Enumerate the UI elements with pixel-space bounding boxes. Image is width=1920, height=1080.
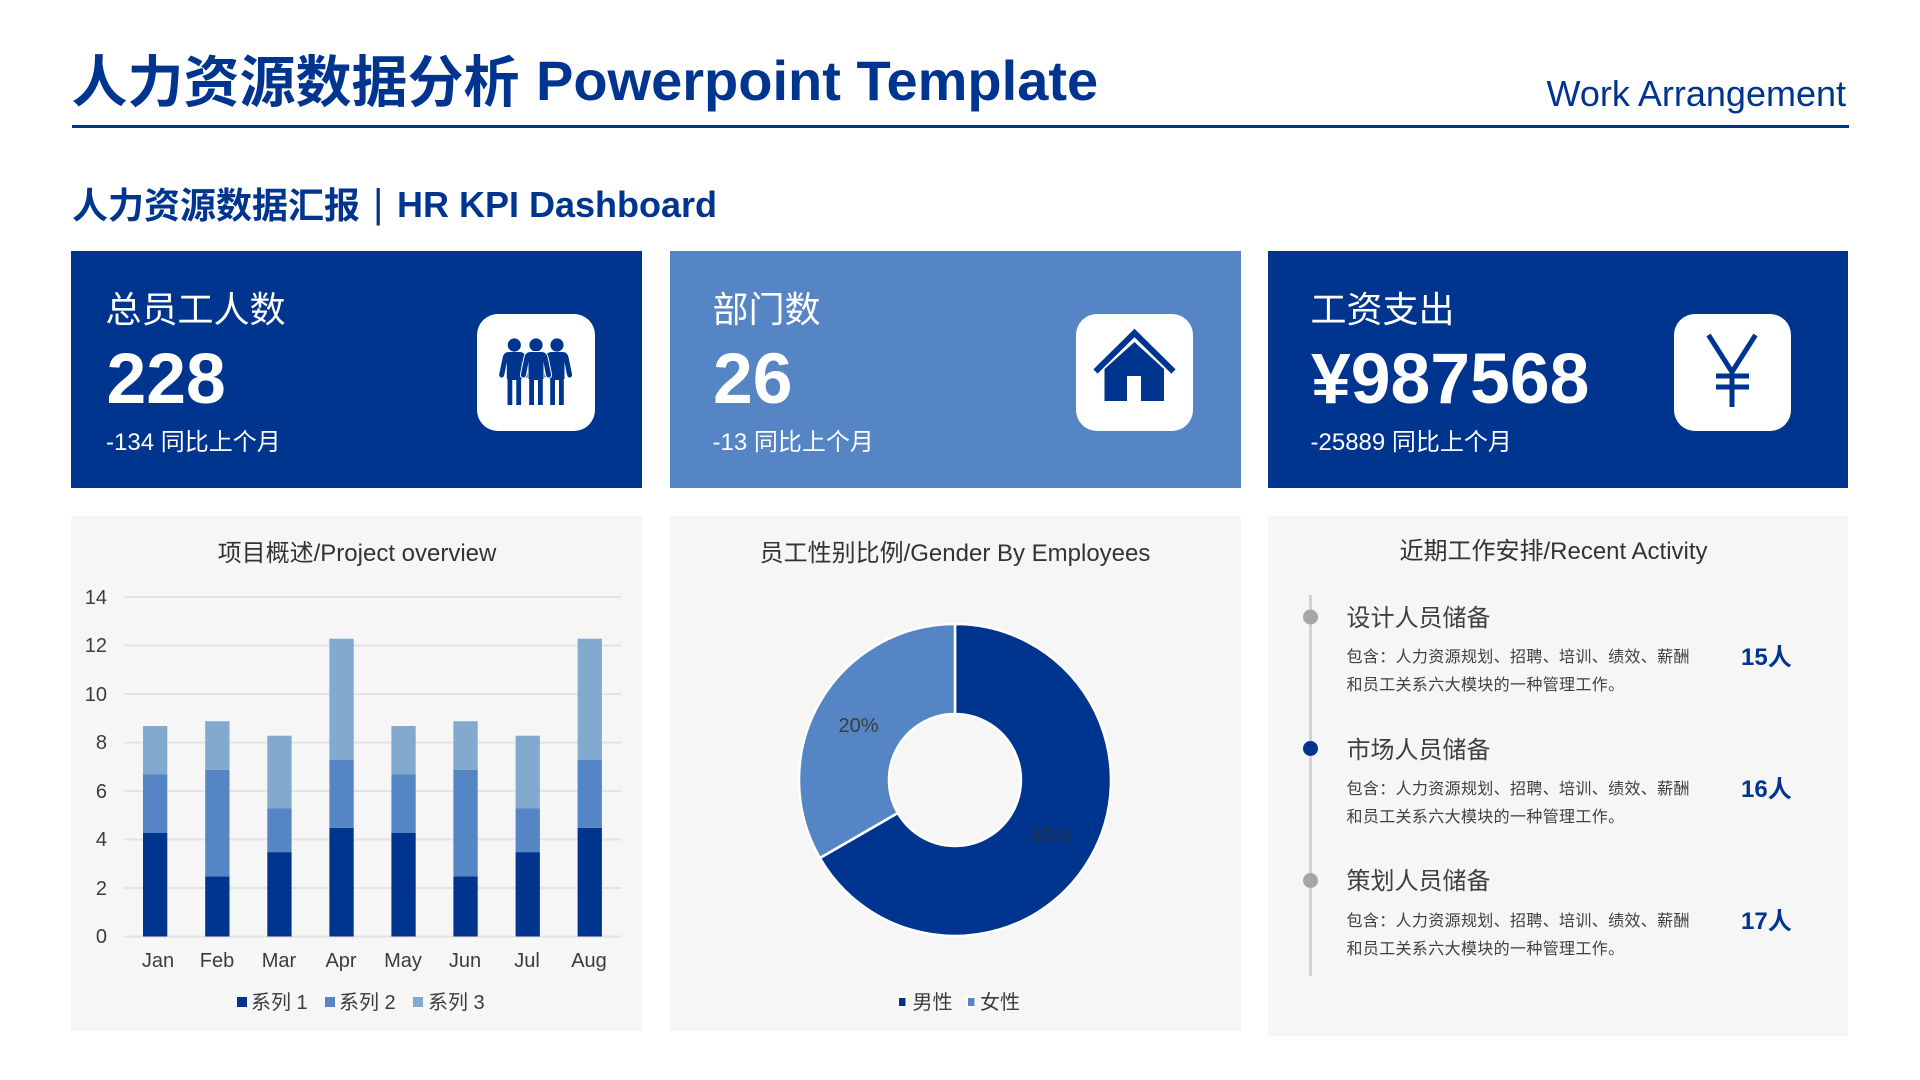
- KPI card: departments: [670, 251, 1241, 488]
- y axis labels: 4: [96, 829, 107, 851]
- x axis labels: Feb: [200, 950, 234, 972]
- KPI card: total employees: [71, 251, 642, 488]
- subtitle: HR KPI Dashboard: [397, 184, 717, 225]
- timeline item 2: 和员工关系六大模块的一种管理工作。: [1346, 808, 1624, 826]
- KPI value: ¥987568: [1311, 339, 1589, 419]
- title: 人力资源数据分析: [72, 51, 520, 114]
- x axis labels: Jun: [449, 950, 481, 972]
- timeline item 1: [1303, 605, 1792, 694]
- donut label 40%: 40%: [1031, 825, 1072, 847]
- subtitle: |: [373, 182, 383, 226]
- timeline item 2: 包含：人力资源规划、招聘、培训、绩效、薪酬: [1346, 780, 1690, 798]
- stacked bar chart: [143, 639, 602, 936]
- panel: recent activity: [1268, 516, 1848, 1036]
- timeline line: [1309, 595, 1312, 976]
- x axis labels: [142, 950, 607, 972]
- y axis labels: [85, 587, 107, 948]
- timeline item 3: 策划人员储备: [1346, 868, 1490, 895]
- KPI label: 部门数: [712, 289, 821, 330]
- y axis labels: 2: [96, 878, 107, 900]
- y axis labels: 12: [85, 635, 107, 657]
- legend: 系列 2: [339, 991, 396, 1014]
- legend: 女性: [980, 991, 1020, 1014]
- donut chart: [799, 624, 1111, 936]
- KPI comparison: -25889 同比上个月: [1310, 429, 1512, 456]
- x axis labels: Mar: [262, 950, 297, 972]
- KPI comparison: -13 同比上个月: [712, 429, 874, 456]
- panel heading: 近期工作安排/Recent Activity: [1399, 538, 1708, 565]
- timeline item 1: 设计人员储备: [1346, 605, 1490, 632]
- icon: people: [477, 314, 595, 431]
- y axis labels: 14: [85, 587, 107, 609]
- timeline item 2: 16人: [1741, 776, 1792, 803]
- subtitle: 人力资源数据汇报: [72, 185, 360, 226]
- timeline item 1: 和员工关系六大模块的一种管理工作。: [1346, 676, 1624, 694]
- KPI card: salary expense: [1268, 251, 1848, 488]
- KPI comparison: -134 同比上个月: [106, 429, 281, 456]
- timeline item 3: [1303, 868, 1792, 958]
- KPI value: 26: [713, 339, 793, 419]
- timeline item 1: 15人: [1741, 644, 1792, 671]
- KPI value: 228: [106, 339, 226, 419]
- legend: [237, 991, 485, 1014]
- y axis labels: 8: [96, 732, 107, 754]
- x axis labels: May: [384, 950, 422, 972]
- y axis labels: 10: [85, 684, 107, 706]
- legend: 男性: [912, 991, 952, 1014]
- timeline item 3: 17人: [1741, 908, 1792, 935]
- timeline item 2: [1303, 737, 1792, 826]
- KPI label: 工资支出: [1310, 289, 1455, 330]
- panel heading: 员工性别比例/Gender By Employees: [760, 540, 1150, 567]
- section label: Work Arrangement: Work Arrangement: [1547, 73, 1846, 114]
- panel: project overview: [71, 516, 642, 1031]
- legend: 系列 3: [428, 991, 485, 1014]
- title: Powerpoint Template: [536, 49, 1098, 112]
- y axis labels: 0: [96, 926, 107, 948]
- timeline item 3: 和员工关系六大模块的一种管理工作。: [1346, 940, 1624, 958]
- donut label 20%: 20%: [838, 715, 879, 737]
- x axis labels: Jul: [514, 950, 540, 972]
- icon: yen: [1674, 314, 1791, 431]
- timeline item 3: 包含：人力资源规划、招聘、培训、绩效、薪酬: [1346, 912, 1690, 930]
- x axis labels: Aug: [571, 950, 607, 972]
- panel: gender by employees: [670, 516, 1241, 1031]
- x axis labels: Jan: [142, 950, 174, 972]
- panel heading: 项目概述/Project overview: [218, 540, 497, 567]
- y axis labels: 6: [96, 781, 107, 803]
- x axis labels: Apr: [325, 950, 357, 972]
- legend: 系列 1: [251, 991, 308, 1014]
- timeline item 2: 市场人员储备: [1346, 737, 1490, 764]
- icon: house: [1076, 314, 1193, 431]
- timeline item 1: 包含：人力资源规划、招聘、培训、绩效、薪酬: [1346, 648, 1690, 666]
- KPI label: 总员工人数: [106, 289, 286, 330]
- legend: [897, 991, 1020, 1014]
